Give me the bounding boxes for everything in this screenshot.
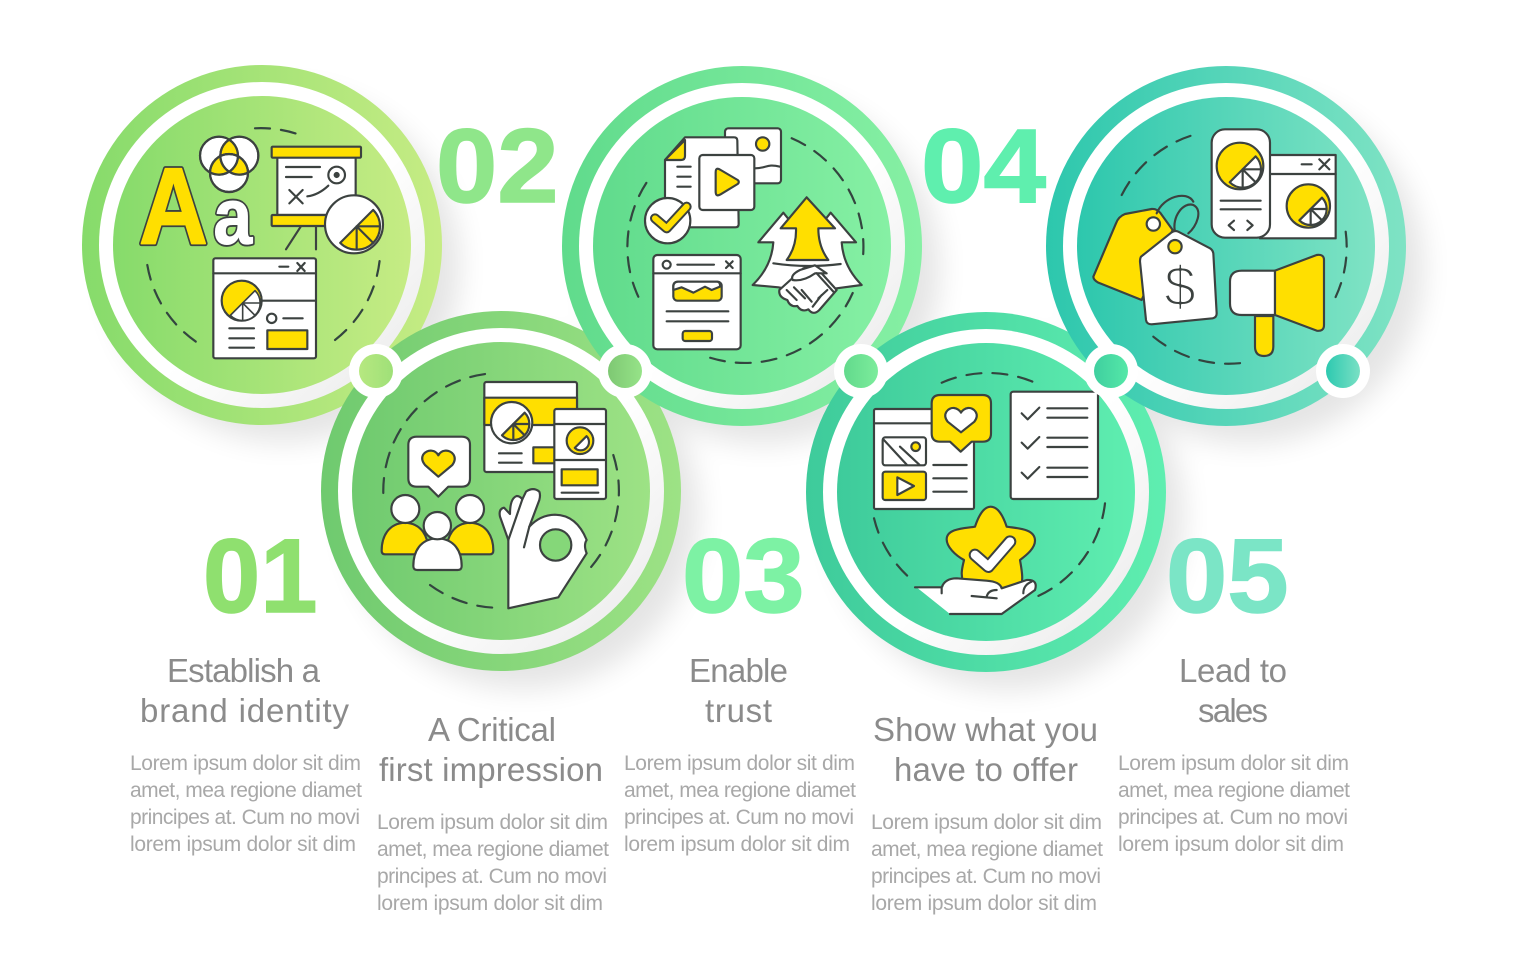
number 01: 01	[203, 518, 317, 635]
icon: critical first impression	[382, 382, 606, 608]
connector node 5	[1316, 344, 1370, 398]
icon: enable trust	[645, 128, 862, 349]
text block: step 4	[871, 811, 1103, 915]
text block: step 2	[377, 811, 609, 915]
heading: step 1	[140, 652, 350, 729]
heading: step 2: A Critical	[428, 711, 556, 748]
text block: step 3: amet, mea regione diamet	[624, 779, 856, 802]
text block: step 5	[1118, 752, 1350, 856]
panel: circle 3	[562, 66, 922, 426]
icon: brand identity	[139, 137, 390, 358]
text block: step 3: principes at. Cum no movi	[624, 806, 854, 829]
text block: step 4: lorem ipsum dolor sit dim	[871, 892, 1097, 915]
panel: circle 4	[806, 312, 1166, 672]
icon: brand identity: A	[139, 146, 208, 267]
icon: lead to sales: $	[1164, 256, 1196, 319]
heading: step 4: Show what you	[873, 711, 1098, 748]
connector node 4	[1084, 344, 1138, 398]
heading: step 2	[379, 711, 603, 788]
text block: step 4: amet, mea regione diamet	[871, 838, 1103, 861]
heading: step 4	[873, 711, 1098, 788]
text block: step 4: principes at. Cum no movi	[871, 865, 1101, 888]
panel: circle 5	[1046, 66, 1406, 426]
circle drop shadows	[108, 90, 1424, 690]
heading: step 3	[689, 652, 788, 729]
text block: step 2: Lorem ipsum dolor sit dim	[377, 811, 608, 834]
icon: show what you have to offer	[874, 392, 1098, 614]
text block: step 1: amet, mea regione diamet	[130, 779, 362, 802]
text block: step 2: principes at. Cum no movi	[377, 865, 607, 888]
icon: brand identity: a	[213, 171, 254, 261]
text block: step 3: lorem ipsum dolor sit dim	[624, 833, 850, 856]
text block: step 5: lorem ipsum dolor sit dim	[1118, 833, 1344, 856]
text block: step 5: Lorem ipsum dolor sit dim	[1118, 752, 1349, 775]
heading: step 1: Establish a	[167, 652, 321, 689]
heading: step 5: Lead to	[1179, 652, 1287, 689]
text block: step 3: Lorem ipsum dolor sit dim	[624, 752, 855, 775]
connector node 2	[598, 344, 652, 398]
heading: step 3: trust	[705, 692, 772, 729]
number 04: 04	[921, 108, 1046, 225]
icon: lead to sales	[1093, 129, 1336, 356]
connector node 1	[349, 344, 403, 398]
heading: step 2: first impression	[379, 751, 603, 788]
text block: step 1: Lorem ipsum dolor sit dim	[130, 752, 361, 775]
panel: circle 1	[82, 65, 442, 425]
text block: step 5: amet, mea regione diamet	[1118, 779, 1350, 802]
icon: brand identity: A	[139, 146, 208, 267]
icon: brand identity: a	[213, 171, 254, 261]
heading: step 1: brand identity	[140, 692, 350, 729]
number 05: 05	[1166, 517, 1289, 634]
text block: step 5: principes at. Cum no movi	[1118, 806, 1348, 829]
text block: step 1	[130, 752, 362, 856]
text block: step 2: amet, mea regione diamet	[377, 838, 609, 861]
text block: step 2: lorem ipsum dolor sit dim	[377, 892, 603, 915]
heading: step 5	[1179, 652, 1287, 729]
panel: circle 2	[321, 311, 681, 671]
text block: step 3	[624, 752, 856, 856]
text block: step 4: Lorem ipsum dolor sit dim	[871, 811, 1102, 834]
number 02: 02	[436, 107, 559, 224]
heading: step 3: Enable	[689, 652, 788, 689]
text block: step 1: lorem ipsum dolor sit dim	[130, 833, 356, 856]
connector node 3	[834, 344, 888, 398]
number 03: 03	[682, 517, 805, 634]
heading: step 5: sales	[1198, 692, 1268, 729]
heading: step 4: have to offer	[894, 751, 1078, 788]
text block: step 1: principes at. Cum no movi	[130, 806, 360, 829]
